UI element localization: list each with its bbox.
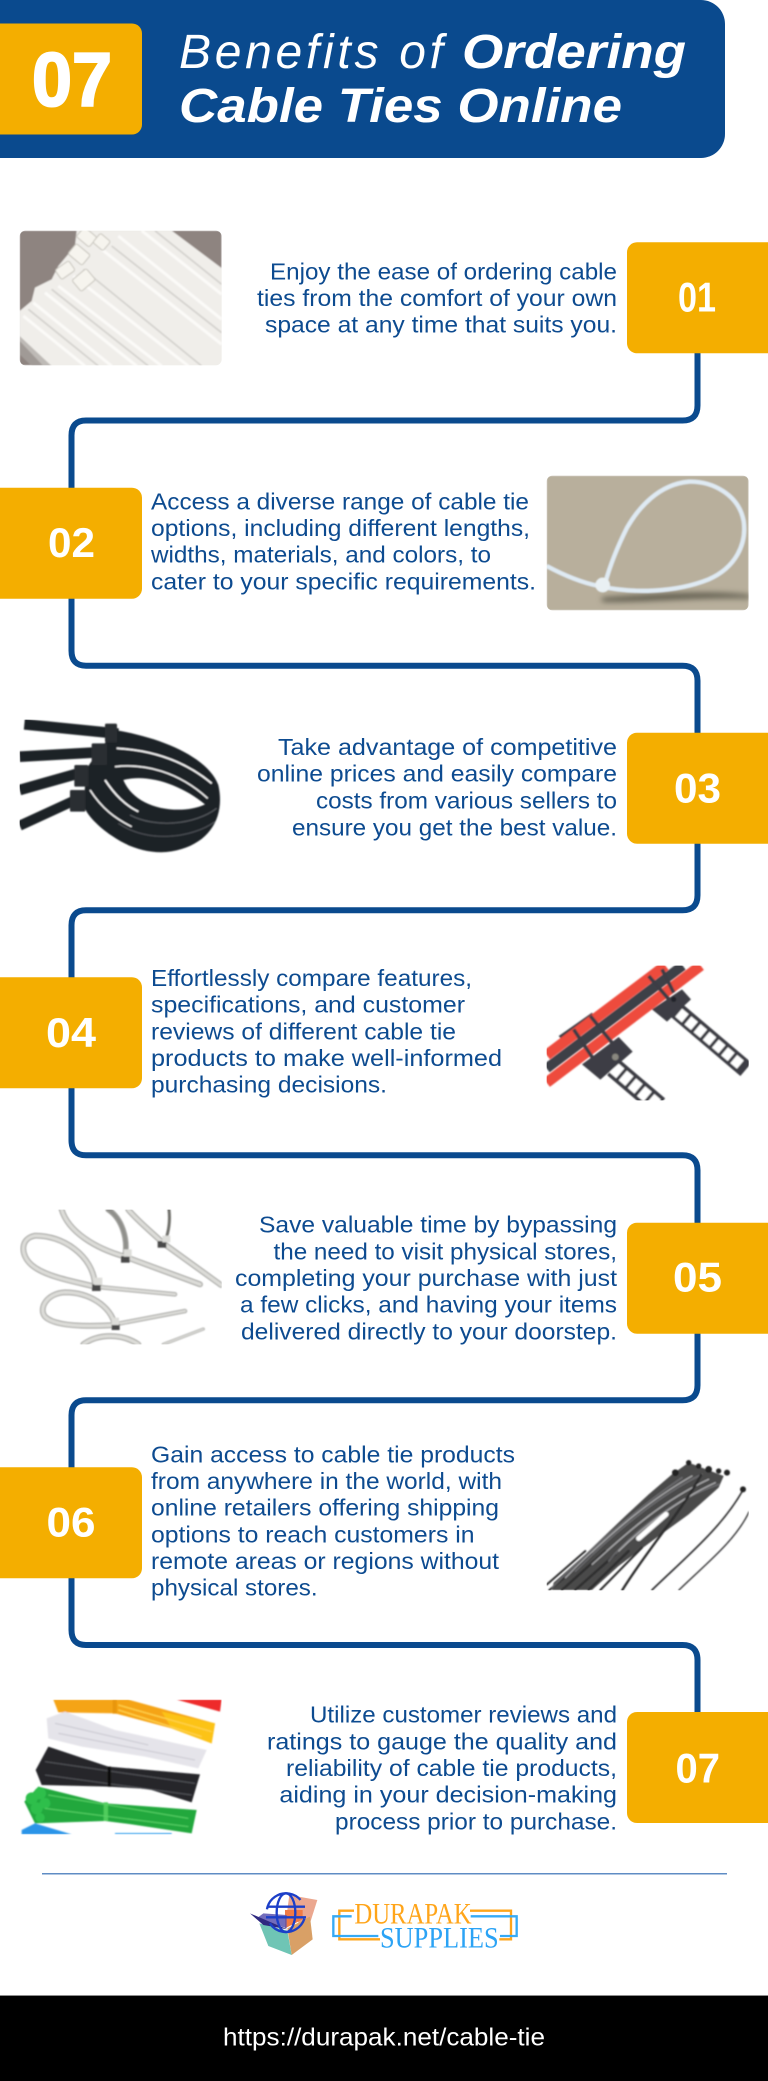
photo: red and black cables with ladder clamps — [547, 966, 746, 1106]
photo: thin black cable tie bundle — [547, 1460, 749, 1590]
logo: Durapak Supplies — [250, 1890, 517, 1955]
number badge 03 — [627, 733, 768, 844]
benefit text 03: Take advantage of competitive — [278, 734, 617, 760]
benefit text 03 — [257, 734, 617, 840]
benefit text 07: Utilize customer reviews and — [310, 1701, 617, 1727]
logo wordmark: DURAPAK — [354, 1897, 472, 1930]
photo: grey cable ties — [23, 1210, 221, 1344]
benefit text 07: process prior to purchase. — [335, 1808, 617, 1834]
footer url: https://durapak.net/cable-tie — [223, 2024, 545, 2052]
header number badge: 07 — [32, 38, 112, 123]
number badge 05 — [627, 1223, 768, 1334]
benefit text 03: costs from various sellers to — [316, 787, 617, 813]
header number badge — [0, 24, 142, 134]
photo: black cable ties — [20, 724, 220, 852]
number badge 03: 03 — [674, 764, 721, 811]
title: Cable Ties Online — [179, 80, 622, 133]
benefit text 06: online retailers offering shipping — [151, 1495, 499, 1521]
benefit text 05: a few clicks, and having your items — [240, 1292, 617, 1318]
benefit text 02: Access a diverse range of cable tie — [151, 488, 529, 514]
benefit text 01 — [257, 258, 617, 338]
benefit text 04: reviews of different cable tie — [151, 1018, 456, 1044]
benefit text 02 — [150, 488, 536, 594]
benefit 05 — [23, 1210, 768, 1344]
benefit text 04: Effortlessly compare features, — [151, 965, 472, 991]
benefit text 06: remote areas or regions without — [151, 1548, 500, 1574]
benefit text 01: Enjoy the ease of ordering cable — [270, 258, 617, 284]
logo wordmark: SUPPLIES — [380, 1921, 499, 1954]
benefit text 07 — [267, 1701, 617, 1834]
benefit text 04: products to make well-informed — [151, 1045, 502, 1071]
number badge 05: 05 — [673, 1254, 722, 1301]
benefit text 07: aiding in your decision-making — [279, 1782, 617, 1808]
footer bar — [0, 1995, 768, 2081]
number badge 04: 04 — [46, 1009, 97, 1056]
logo wordmark — [354, 1897, 499, 1954]
benefit text 02: options, including different lengths, — [151, 515, 530, 541]
number badge 07 — [627, 1712, 768, 1823]
title: Ordering — [462, 26, 686, 79]
benefit text 05: the need to visit physical stores, — [274, 1238, 617, 1264]
benefit 03 — [20, 724, 768, 852]
benefit text 05: completing your purchase with just — [235, 1265, 618, 1291]
benefit text 05: Save valuable time by bypassing — [259, 1212, 617, 1238]
benefit text 04: purchasing decisions. — [151, 1072, 387, 1098]
benefit text 06 — [151, 1441, 515, 1601]
benefit text 06: physical stores. — [151, 1575, 318, 1601]
benefit text 05 — [235, 1212, 618, 1344]
photo: single white tie loop — [547, 476, 750, 610]
benefit text 03: ensure you get the best value. — [292, 814, 617, 840]
title — [179, 26, 686, 133]
benefit text 01: space at any time that suits you. — [265, 312, 617, 338]
benefit text 06: options to reach customers in — [151, 1521, 474, 1547]
number badge 02: 02 — [48, 519, 95, 566]
title: Benefits of — [179, 26, 448, 79]
number badge 07: 07 — [676, 1744, 720, 1791]
benefit text 04: specifications, and customer — [151, 992, 465, 1018]
benefit 01 — [20, 227, 768, 366]
benefit text 07: ratings to gauge the quality and — [267, 1728, 617, 1754]
number badge 01 — [627, 242, 768, 353]
benefit text 07: reliability of cable tie products, — [286, 1755, 617, 1781]
benefit text 01: ties from the comfort of your own — [257, 285, 617, 311]
number badge 01: 01 — [678, 274, 716, 321]
logo icon: box and globe — [250, 1890, 317, 1955]
number badge 06: 06 — [46, 1499, 96, 1546]
header banner — [0, 0, 725, 158]
photo: white cable ties — [20, 227, 223, 366]
benefit text 02: cater to your specific requirements. — [151, 568, 536, 594]
benefit text 02: widths, materials, and colors, to — [150, 542, 491, 568]
connector line — [72, 340, 698, 1720]
number badge 06 — [0, 1467, 142, 1578]
photo: coloured cable tie bundles — [22, 1700, 222, 1834]
benefit text 03: online prices and easily compare — [257, 761, 617, 787]
number badge 04 — [0, 977, 142, 1088]
benefit text 06: Gain access to cable tie products — [151, 1441, 515, 1467]
benefit text 04 — [151, 965, 502, 1098]
number badge 02 — [0, 488, 142, 599]
benefit text 06: from anywhere in the world, with — [151, 1468, 502, 1494]
benefit 02 — [0, 476, 750, 610]
benefit 04 — [0, 965, 746, 1106]
benefit 07 — [22, 1700, 768, 1834]
benefit 06 — [0, 1441, 749, 1601]
logo frame — [333, 1911, 517, 1939]
benefit text 05: delivered directly to your doorstep. — [241, 1318, 617, 1344]
